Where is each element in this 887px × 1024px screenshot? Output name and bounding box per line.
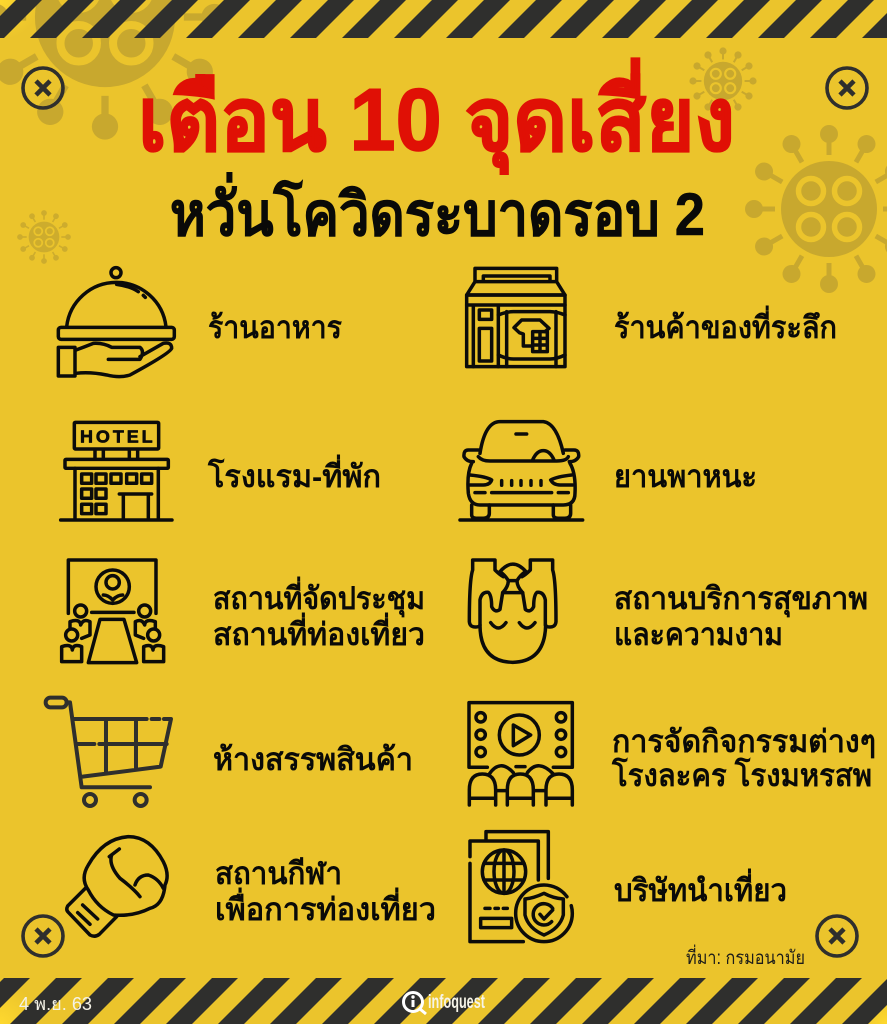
label: meeting and attractions: สถานที่จัดประชุม <box>213 576 425 618</box>
icon: car <box>460 422 583 520</box>
date: 4 พ.ย. 63 <box>19 994 92 1014</box>
icon: theatre <box>469 703 572 805</box>
bottom hazard stripes <box>0 978 887 1024</box>
subtitle: หวั่นโควิดระบาดรอบ 2 <box>170 172 705 248</box>
logo: infoquest <box>404 992 485 1014</box>
icon: hotel <box>61 422 172 520</box>
label: health and beauty: และความงาม <box>614 617 783 652</box>
label: department store: ห้างสรรพสินค้า <box>213 742 413 777</box>
label: tour companies: บริษัทนำเที่ยว <box>614 868 787 908</box>
label: sports tourism: เพื่อการท่องเที่ยว <box>215 887 436 927</box>
label: health and beauty: สถานบริการสุขภาพ <box>614 581 868 618</box>
label: meeting and attractions <box>213 576 425 652</box>
title: เตือน 10 จุดเสี่ยง <box>138 58 735 175</box>
icon: boxing glove <box>67 837 167 936</box>
label: sports tourism <box>215 856 436 927</box>
label: hotel: โรงแรม-ที่พัก <box>207 454 381 494</box>
icon: meeting <box>62 560 164 663</box>
icon: hotel: HOTEL <box>80 427 153 447</box>
icon: close top left <box>23 68 63 108</box>
label: events and theatres: โรงละคร โรงมหรสพ <box>611 757 872 793</box>
label: health and beauty <box>614 581 868 652</box>
label: events and theatres <box>611 724 876 793</box>
top hazard stripes <box>0 0 887 38</box>
icon: souvenir shop <box>467 268 565 367</box>
icon: close bottom left <box>23 916 63 956</box>
label: events and theatres: การจัดกิจกรรมต่างๆ <box>612 724 876 759</box>
icon: restaurant <box>58 268 174 377</box>
icon: close bottom right <box>817 916 857 956</box>
icon: passport <box>470 832 572 942</box>
icon: close top right <box>827 68 867 108</box>
label: meeting and attractions: สถานที่ท่องเที่ยว <box>213 612 425 652</box>
label: sports tourism: สถานกีฬา <box>215 856 342 891</box>
logo: infoquest: infoquest <box>428 992 485 1013</box>
icon: shopping cart <box>46 698 171 806</box>
label: vehicles: ยานพาหนะ <box>614 459 757 494</box>
virus decorations <box>0 0 887 293</box>
label: souvenir shop: ร้านค้าของที่ระลึก <box>614 305 837 345</box>
label: restaurant: ร้านอาหาร <box>208 310 342 345</box>
icon: spa <box>469 560 556 662</box>
source note: ที่มา: กรมอนามัย <box>686 944 805 969</box>
